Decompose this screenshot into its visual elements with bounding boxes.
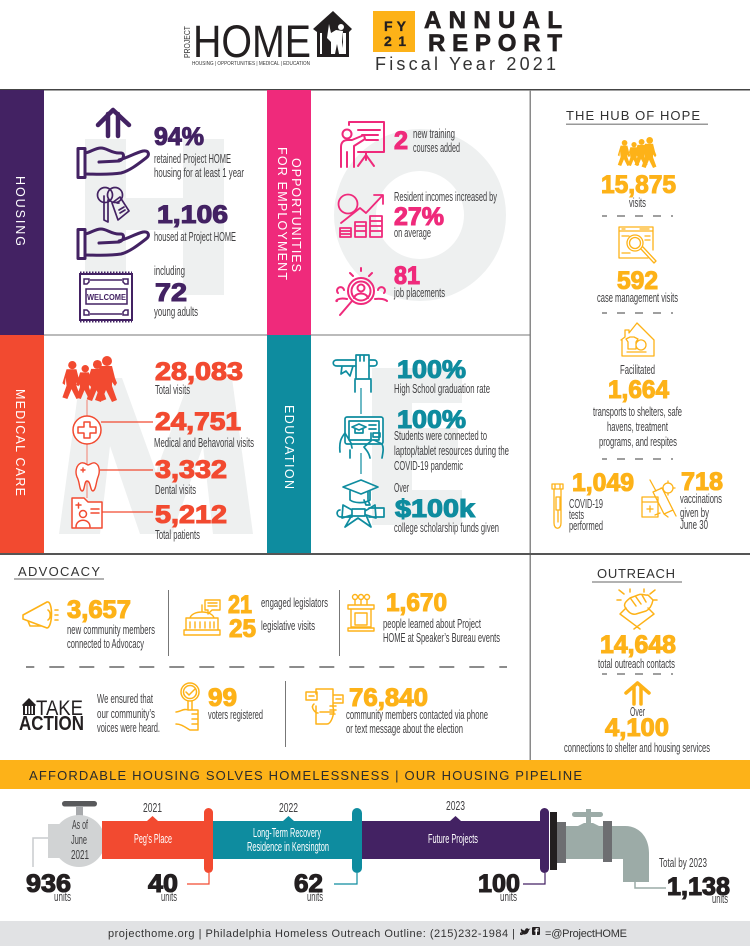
footer xyxy=(0,921,750,946)
icon: welcome mat xyxy=(80,273,132,321)
title: annual report: ANNUAL xyxy=(424,7,562,34)
stat: 100% graduation: 100% xyxy=(397,356,466,384)
stat: 718: June 30 xyxy=(680,518,708,532)
total: 62 units: 62 xyxy=(294,870,323,898)
stat: 4,100: 4,100 xyxy=(605,714,669,742)
outreach heading: OUTREACH xyxy=(597,566,675,581)
stat: 24,751 xyxy=(154,408,254,450)
stat: 3,657: 3,657 xyxy=(67,596,131,624)
stat: 72: 72 xyxy=(155,279,187,307)
stat: 14,648: total outreach contacts xyxy=(598,657,675,671)
education label: EDUCATION xyxy=(282,405,296,489)
icon: clasped hands xyxy=(617,589,657,629)
stat: 81 xyxy=(393,262,445,300)
stat: legislators: 25 xyxy=(229,615,256,643)
stat: $100k: college scholarship funds given xyxy=(394,521,499,535)
total: 62 units: units xyxy=(307,890,323,904)
ghost letter O xyxy=(355,150,485,280)
stat: 81: job placements xyxy=(393,286,445,300)
icon: job search xyxy=(336,268,387,315)
logo: Project HOME: HOUSING | OPPORTUNITIES | MEDICAL | EDUCATION xyxy=(192,61,310,67)
pipe segment: Long-Term Recovery: 2022 xyxy=(279,801,298,815)
pipe segment: Future Projects xyxy=(362,799,549,884)
stat: 1,049: performed xyxy=(569,519,603,533)
stat: 1,670 xyxy=(383,589,500,645)
title: annual report: Fiscal Year 2021 xyxy=(375,54,556,74)
dashes xyxy=(26,666,507,668)
stat: 27%: Resident incomes increased by xyxy=(394,190,497,204)
icon: house with supplies xyxy=(621,323,654,356)
stat: 100% connected: COVID-19 pandemic xyxy=(394,459,463,473)
logo: Project HOME: PROJECT xyxy=(183,26,192,58)
stat: 27%: 27% xyxy=(394,203,444,231)
total: 1,138 units: 1,138 xyxy=(667,873,730,901)
stat: 24,751: Medical and Behavorial visits xyxy=(154,436,254,450)
stat: 28,083: Total visits xyxy=(155,383,190,397)
icon: keys xyxy=(98,188,129,222)
housing side bar xyxy=(0,90,44,335)
icon: vaccine xyxy=(642,480,676,517)
icon: twitter xyxy=(520,928,530,935)
icon: hand one xyxy=(78,148,148,178)
stat: 99: 99 xyxy=(208,684,237,712)
stat: 100% connected: laptop/tablet resources during the xyxy=(394,444,509,458)
stat: 81: 81 xyxy=(394,262,420,290)
stat: 3,332: Dental visits xyxy=(155,483,196,497)
stat: 2 courses: courses added xyxy=(413,141,460,155)
stat: 28,083: 28,083 xyxy=(155,358,243,386)
stat: 1,049 xyxy=(569,469,634,533)
FY21 badge: 21 xyxy=(384,33,406,49)
total: 100 units: 100 xyxy=(478,870,520,898)
stat: 718: 718 xyxy=(681,468,723,496)
stat: 2 courses xyxy=(394,127,460,155)
pipe segment: Future Projects: 2023 xyxy=(446,799,465,813)
stat: 1,049: tests xyxy=(569,508,584,522)
stat: legislators: legislative visits xyxy=(261,619,315,633)
total: 1,138 units: Total by 2023 xyxy=(659,856,707,870)
banner: housing pipeline xyxy=(0,760,750,789)
logo: Project HOME: HOME xyxy=(193,16,311,67)
starting valve xyxy=(33,801,105,867)
stat: 27% xyxy=(394,190,497,240)
icon: welcome mat: WELCOME xyxy=(87,293,127,302)
icon: graduation cap and diploma xyxy=(337,480,384,527)
stat: 100% graduation xyxy=(394,356,490,396)
stat: 718: vaccinations xyxy=(680,492,722,506)
stat: 3,332: 3,332 xyxy=(155,456,227,484)
icon: presenter xyxy=(341,122,384,167)
total: 40 units: 40 xyxy=(148,870,178,898)
banner: housing pipeline: AFFORDABLE HOUSING SOLVES HOMELESSNESS | OUR HOUSING PIPELINE xyxy=(29,768,582,783)
starting valve: June xyxy=(71,833,87,847)
employment label: FOR EMPLOYMENT xyxy=(275,147,289,280)
stat: 1,670: 1,670 xyxy=(386,589,447,617)
stat: 94%: housing for at least 1 year xyxy=(154,166,244,180)
employment label xyxy=(275,147,303,280)
icon: megaphone xyxy=(23,602,58,628)
stat: 3,332 xyxy=(155,456,227,497)
pipe segment: Long-Term Recovery xyxy=(213,801,362,884)
icon: case management xyxy=(619,227,656,263)
dashes xyxy=(602,458,673,460)
stat: 15,875: 15,875 xyxy=(601,171,676,199)
footer: projecthome.org | Philadelphia Homeless Outreach Outline: (215)232-1984 | xyxy=(108,928,515,940)
panel frame lines xyxy=(0,89,750,760)
advocacy heading: ADVOCACY xyxy=(18,564,100,579)
icon: phone messages xyxy=(306,689,343,724)
stat: 100% connected: 100% xyxy=(397,406,466,434)
stat: 76,840: community members contacted via phone xyxy=(346,708,488,722)
stat: 72 xyxy=(154,264,198,319)
divider xyxy=(285,681,286,747)
stat: 94%: 94% xyxy=(154,123,204,151)
stat: $100k xyxy=(394,481,499,535)
stat: 1,106 xyxy=(154,201,236,244)
icon: tooth xyxy=(76,463,99,491)
title: annual report: REPORT xyxy=(428,30,562,57)
stat: 3,657: new community members xyxy=(67,623,155,637)
medical side bar xyxy=(0,335,44,553)
stat: $100k: $100k xyxy=(395,495,475,523)
icon: walking people xyxy=(62,356,117,402)
stat: 27%: on average xyxy=(394,226,431,240)
icon: income chart xyxy=(338,194,383,237)
icon: walking people xyxy=(618,137,656,168)
stat: 5,212 xyxy=(155,501,227,542)
hub heading: THE HUB OF HOPE xyxy=(566,108,700,123)
stat: legislators: 21 xyxy=(228,591,252,619)
text: we ensured: We ensured that xyxy=(97,692,153,706)
stat: 72: young adults xyxy=(154,305,198,319)
stat: 1,664 xyxy=(593,363,682,449)
dashes xyxy=(602,312,673,314)
panel: the hub of hope xyxy=(552,108,723,533)
panel: opportunities for employment xyxy=(267,90,497,335)
stat: 76,840: or text message about the election xyxy=(346,722,463,736)
stat: 2 courses: new training xyxy=(413,127,455,141)
icon: house arrow xyxy=(626,683,649,704)
text: we ensured: voices were heard. xyxy=(97,721,160,735)
stat: 24,751: 24,751 xyxy=(155,408,241,436)
pipe segment: Long-Term Recovery: Long-Term Recovery xyxy=(253,826,321,840)
stat: 4,100 xyxy=(564,705,710,755)
stat: 99: voters registered xyxy=(208,708,263,722)
logo: take action: TAKE xyxy=(36,697,83,720)
stat: 100% connected: Students were connected to xyxy=(394,429,487,443)
total: 1,138 units: units xyxy=(712,892,728,906)
employment label: OPPORTUNITIES xyxy=(289,158,303,272)
stat: 100% connected xyxy=(394,406,509,473)
stat: 14,648: 14,648 xyxy=(600,631,676,659)
footer handle: =@ProjectHOME xyxy=(545,928,627,940)
ghost letter H xyxy=(85,139,224,295)
FY21 badge xyxy=(373,11,415,52)
stat: 592 xyxy=(597,267,678,305)
connector lines xyxy=(360,388,362,474)
icon: hand with diploma xyxy=(333,355,377,392)
stat: 94%: retained Project HOME xyxy=(154,152,231,166)
connector lines xyxy=(87,400,153,512)
stat: 76,840 xyxy=(346,684,488,736)
total: 936 units: 936 xyxy=(26,870,71,898)
stat: 76,840: 76,840 xyxy=(349,684,428,712)
icon: hand two xyxy=(78,229,148,258)
total: 1,138 units xyxy=(659,856,730,906)
icon: patient folder xyxy=(72,498,102,528)
icon: tablet xyxy=(340,417,383,458)
icon: house arrow xyxy=(98,110,129,136)
stat: 1,106: 1,106 xyxy=(157,201,228,229)
stat: legislators xyxy=(228,591,328,643)
pipe segment: Peg's Place: Peg’s Place xyxy=(134,832,172,846)
icon: facebook xyxy=(532,927,540,935)
stat: 3,657: connected to Advocacy xyxy=(67,637,144,651)
stat: 100% graduation: High School graduation rate xyxy=(394,382,490,396)
divider xyxy=(339,590,340,656)
stat: 1,049: 1,049 xyxy=(572,469,634,497)
medical label: MEDICAL CARE xyxy=(13,389,27,496)
FY21 badge: FY xyxy=(384,18,407,34)
stat: 3,657 xyxy=(67,596,155,651)
stat: 1,106: housed at Project HOME xyxy=(154,230,236,244)
stat: 72: including xyxy=(154,264,185,278)
icon: capitol xyxy=(184,600,220,635)
panel: advocacy xyxy=(14,564,507,747)
pipe segment: Future Projects: Future Projects xyxy=(428,832,478,846)
panel: education xyxy=(267,335,509,553)
total: 936 units: units xyxy=(54,890,71,904)
pipe segment: Long-Term Recovery: Residence in Kensington xyxy=(247,840,329,854)
panel: outreach xyxy=(564,566,710,755)
ghost letter M xyxy=(59,378,253,534)
pipe segment: Peg's Place: 2021 xyxy=(143,801,162,815)
stat: 592: 592 xyxy=(617,267,658,295)
stat: 1,670: HOME at Speaker’s Bureau events xyxy=(383,631,500,645)
pipeline chart xyxy=(26,799,730,906)
icon: test tube xyxy=(552,484,563,528)
text: we ensured xyxy=(97,692,160,735)
stat: 718: given by xyxy=(680,506,709,520)
pipe segment: Peg's Place xyxy=(102,801,213,884)
total: 100 units: units xyxy=(500,890,517,904)
header xyxy=(183,7,562,74)
stat: 99 xyxy=(208,684,263,722)
stat: 5,212: 5,212 xyxy=(155,501,227,529)
title: annual report xyxy=(375,7,562,74)
starting valve: As of xyxy=(72,818,88,832)
stat: 1,664: havens, treatment xyxy=(607,420,668,434)
divider xyxy=(168,590,169,656)
icon: hand with check xyxy=(176,683,199,730)
stat: 718 xyxy=(680,468,723,532)
stat: 1,664: programs, and respites xyxy=(599,435,677,449)
stat: 5,212: Total patients xyxy=(155,528,200,542)
stat: 15,875: visits xyxy=(629,196,646,210)
panel: housing xyxy=(0,90,244,335)
dashes xyxy=(602,673,673,675)
stat: 1,664: transports to shelters, safe xyxy=(593,405,682,419)
logo: take action xyxy=(19,697,84,735)
starting valve: 2021 xyxy=(71,848,89,862)
icon: podium xyxy=(348,594,374,631)
dashes xyxy=(602,215,673,217)
total: 40 units: units xyxy=(161,890,177,904)
stat: 1,664: Facilitated xyxy=(620,363,655,377)
stat: 28,083 xyxy=(155,358,243,397)
logo: take action: ACTION xyxy=(19,713,84,735)
employment side bar xyxy=(267,90,311,335)
stat: 1,670: people learned about Project xyxy=(383,617,481,631)
stat: 592: case management visits xyxy=(597,291,678,305)
housing label: HOUSING xyxy=(13,176,27,246)
panel: medical care xyxy=(0,335,254,553)
stat: 4,100: Over xyxy=(630,705,645,719)
faucet xyxy=(550,809,666,888)
stat: 2 courses: 2 xyxy=(394,127,408,155)
ghost letter E xyxy=(372,368,462,525)
stat: 1,049: COVID-19 xyxy=(569,497,603,511)
icon: medical cross xyxy=(73,416,101,444)
stat: 94% xyxy=(154,123,244,180)
text: we ensured: our community’s xyxy=(97,707,155,721)
stat: $100k: Over xyxy=(394,481,409,495)
stat: legislators: engaged legislators xyxy=(261,596,328,610)
stat: 14,648 xyxy=(598,631,676,671)
education side bar xyxy=(267,335,311,553)
stat: 1,664: 1,664 xyxy=(608,376,669,404)
